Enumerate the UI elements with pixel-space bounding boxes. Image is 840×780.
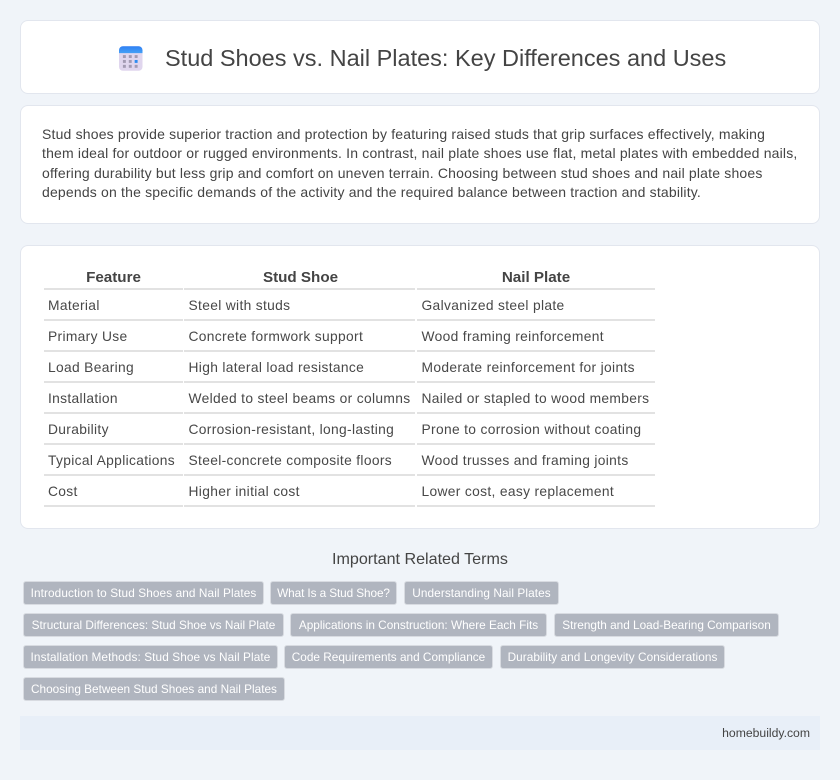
table rows: Higher initial cost bbox=[188, 484, 300, 499]
table rows: Typical Applications bbox=[48, 453, 175, 468]
table rows: Concrete formwork support bbox=[188, 329, 363, 344]
table rows: Load Bearing bbox=[48, 360, 134, 375]
related terms tags: Applications in Construction: Where Each Fits bbox=[299, 618, 538, 632]
table rows: Primary Use bbox=[48, 329, 128, 344]
table rows: Welded to steel beams or columns bbox=[188, 391, 410, 406]
related terms tags: Durability and Longevity Considerations bbox=[508, 650, 717, 664]
table rows: Steel with studs bbox=[188, 298, 290, 313]
icon: calendar bbox=[119, 46, 143, 71]
intro text: Stud shoes provide superior traction and protection by featuring raised studs that grip surfaces effectively, making bbox=[42, 126, 765, 142]
table rows: Durability bbox=[48, 422, 109, 437]
related terms tags: Strength and Load-Bearing Comparison bbox=[562, 618, 771, 632]
footer brand: homebuildy.com bbox=[722, 726, 810, 740]
related terms tags: Choosing Between Stud Shoes and Nail Plates bbox=[31, 682, 277, 696]
table rows: Corrosion-resistant, long-lasting bbox=[188, 422, 394, 437]
related terms heading: Important Related Terms bbox=[332, 550, 508, 568]
intro panel bbox=[20, 105, 820, 224]
table rows: Material bbox=[48, 298, 100, 313]
table header bbox=[86, 269, 570, 286]
table header: Feature bbox=[86, 269, 141, 286]
table rows: Nailed or stapled to wood members bbox=[422, 391, 649, 406]
table header: Stud Shoe bbox=[263, 269, 338, 286]
intro text bbox=[42, 126, 797, 200]
table rows: Steel-concrete composite floors bbox=[188, 453, 392, 468]
comparison table panel bbox=[20, 245, 820, 529]
title: Stud Shoes vs. Nail Plates: Key Differences and Uses bbox=[165, 45, 726, 71]
table rows: Galvanized steel plate bbox=[422, 298, 565, 313]
table rows: Cost bbox=[48, 484, 78, 499]
intro text: depends on the specific demands of the activity and the required balance between traction and stability. bbox=[42, 184, 701, 200]
table rows bbox=[44, 288, 655, 507]
table header: Nail Plate bbox=[502, 269, 570, 286]
intro text: offering durability but less grip and comfort on uneven terrain. Choosing between stud shoes and nail plate shoes bbox=[42, 165, 763, 181]
related terms tags: Code Requirements and Compliance bbox=[292, 650, 485, 664]
related terms tags: Understanding Nail Plates bbox=[412, 586, 551, 600]
table rows: Installation bbox=[48, 391, 118, 406]
related terms tags: Structural Differences: Stud Shoe vs Nail Plate bbox=[32, 618, 275, 632]
header panel bbox=[20, 20, 820, 94]
footer bar bbox=[20, 716, 820, 750]
related terms tags: Introduction to Stud Shoes and Nail Plates bbox=[31, 586, 256, 600]
table rows: High lateral load resistance bbox=[188, 360, 364, 375]
table rows: Wood trusses and framing joints bbox=[422, 453, 629, 468]
table rows: Lower cost, easy replacement bbox=[422, 484, 614, 499]
intro text: them ideal for outdoor or rugged environments. In contrast, nail plate shoes use flat, metal plates with embedded nails, bbox=[42, 145, 797, 161]
related terms tags: What Is a Stud Shoe? bbox=[277, 586, 390, 600]
related terms tags: Installation Methods: Stud Shoe vs Nail Plate bbox=[31, 650, 270, 664]
table rows: Wood framing reinforcement bbox=[422, 329, 604, 344]
table rows: Prone to corrosion without coating bbox=[422, 422, 641, 437]
table rows: Moderate reinforcement for joints bbox=[422, 360, 635, 375]
related terms tags bbox=[23, 581, 779, 701]
